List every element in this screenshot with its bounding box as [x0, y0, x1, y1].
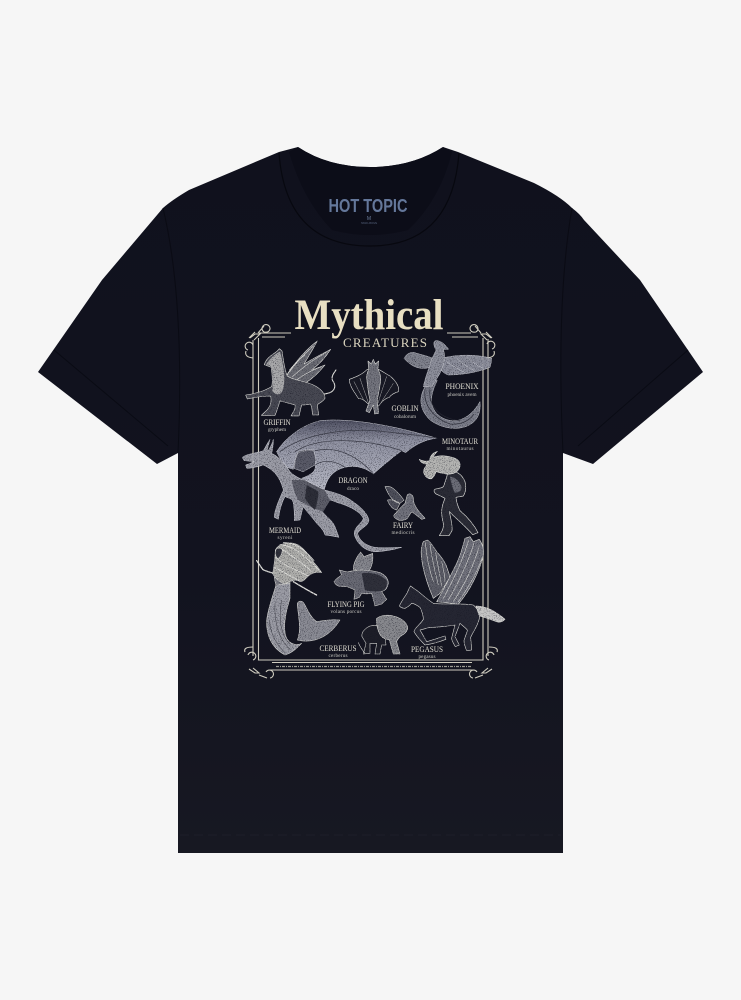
- dragon label: [338, 476, 368, 492]
- cerberus label: CERBERUS: [320, 644, 356, 653]
- mermaid face: [275, 548, 282, 559]
- neck label: [328, 196, 408, 225]
- minotaur mane and head: [419, 451, 460, 479]
- phoenix right wing: [440, 355, 492, 375]
- title: Mythical: Mythical: [294, 292, 444, 339]
- shirt body and sleeves: [38, 147, 703, 853]
- brand name: HOT TOPIC: [328, 196, 408, 216]
- pegasus label: PEGASUS: [411, 645, 443, 654]
- mermaid torso and arms: [274, 568, 290, 585]
- mermaid tail fin: [297, 601, 340, 641]
- horse tail: [476, 606, 505, 622]
- phoenix label: phoenix avem: [448, 392, 476, 398]
- dragon: [242, 420, 437, 552]
- fairy label: mediocris: [392, 530, 414, 536]
- inner back of collar: [289, 147, 452, 235]
- dragon body and tail: [242, 439, 402, 552]
- flying pig label: [328, 600, 365, 615]
- pegasus label: pegasus: [418, 654, 436, 660]
- care text: HAND ABOVE: [361, 222, 377, 225]
- cerberus label: [320, 644, 356, 659]
- minotaur: [419, 451, 478, 536]
- minotaur label: [442, 437, 479, 452]
- phoenix label: PHOENIX: [446, 382, 479, 391]
- minotaur label: minotaurus: [446, 446, 474, 452]
- griffin: [246, 341, 336, 416]
- minotaur label: MINOTAUR: [442, 437, 479, 446]
- collar ribbing seam: [279, 153, 459, 246]
- phoenix: [404, 341, 492, 428]
- goblin label: cobalorum: [394, 414, 416, 420]
- griffin label: [264, 418, 291, 433]
- mermaid hair: [273, 543, 322, 584]
- cerberus label: cerberus: [328, 653, 348, 659]
- fairy body: [394, 494, 425, 520]
- hem stitching: [180, 834, 561, 836]
- cerberus heads: [377, 615, 408, 654]
- pig body: [334, 570, 388, 606]
- pig wing: [353, 552, 373, 573]
- goblin cape: [349, 369, 399, 406]
- size: M: [367, 216, 371, 222]
- pegasus: [399, 537, 505, 651]
- front wing: [437, 537, 484, 604]
- phoenix tail: [421, 380, 480, 428]
- sleeve seams: [54, 208, 688, 453]
- phoenix label: [446, 382, 479, 398]
- dragon label: draco: [347, 486, 359, 492]
- mermaid tail: [267, 583, 302, 655]
- mermaid label: syreni: [278, 535, 293, 541]
- t-shirt: [38, 147, 703, 853]
- subtitle: Creatures: CREATURES: [343, 335, 427, 350]
- goblin label: GOBLIN: [392, 404, 419, 413]
- fairy label: [392, 521, 414, 536]
- rear wing: [421, 540, 449, 598]
- flying pig label: FLYING PIG: [328, 600, 365, 609]
- horse body: [399, 586, 479, 651]
- goblin label: [392, 404, 419, 420]
- fairy wings: [385, 486, 404, 510]
- phoenix body and head: [423, 341, 449, 387]
- decorative frame: [245, 325, 497, 678]
- flying pig label: volans porcus: [330, 609, 362, 615]
- phoenix left wing: [404, 352, 435, 368]
- cerberus body: [358, 626, 386, 654]
- fairy label: FAIRY: [393, 521, 413, 530]
- griffin wings: [285, 341, 331, 384]
- minotaur body: [434, 471, 478, 536]
- griffin body: [246, 349, 325, 416]
- cerberus: [358, 615, 408, 654]
- creature illustrations: [242, 341, 505, 655]
- fairy: [385, 486, 425, 520]
- pegasus label: [411, 645, 443, 660]
- creature labels: [264, 382, 479, 660]
- dragon label: DRAGON: [338, 476, 368, 485]
- griffin label: GRIFFIN: [264, 418, 291, 427]
- dragon wing: [277, 420, 437, 490]
- mermaid label: [269, 526, 301, 541]
- goblin: [349, 359, 399, 414]
- flying pig: [334, 552, 388, 606]
- griffin label: gryphem: [268, 427, 286, 433]
- mermaid label: MERMAID: [269, 526, 301, 535]
- mermaid: [257, 543, 340, 655]
- goblin figure: [366, 359, 381, 414]
